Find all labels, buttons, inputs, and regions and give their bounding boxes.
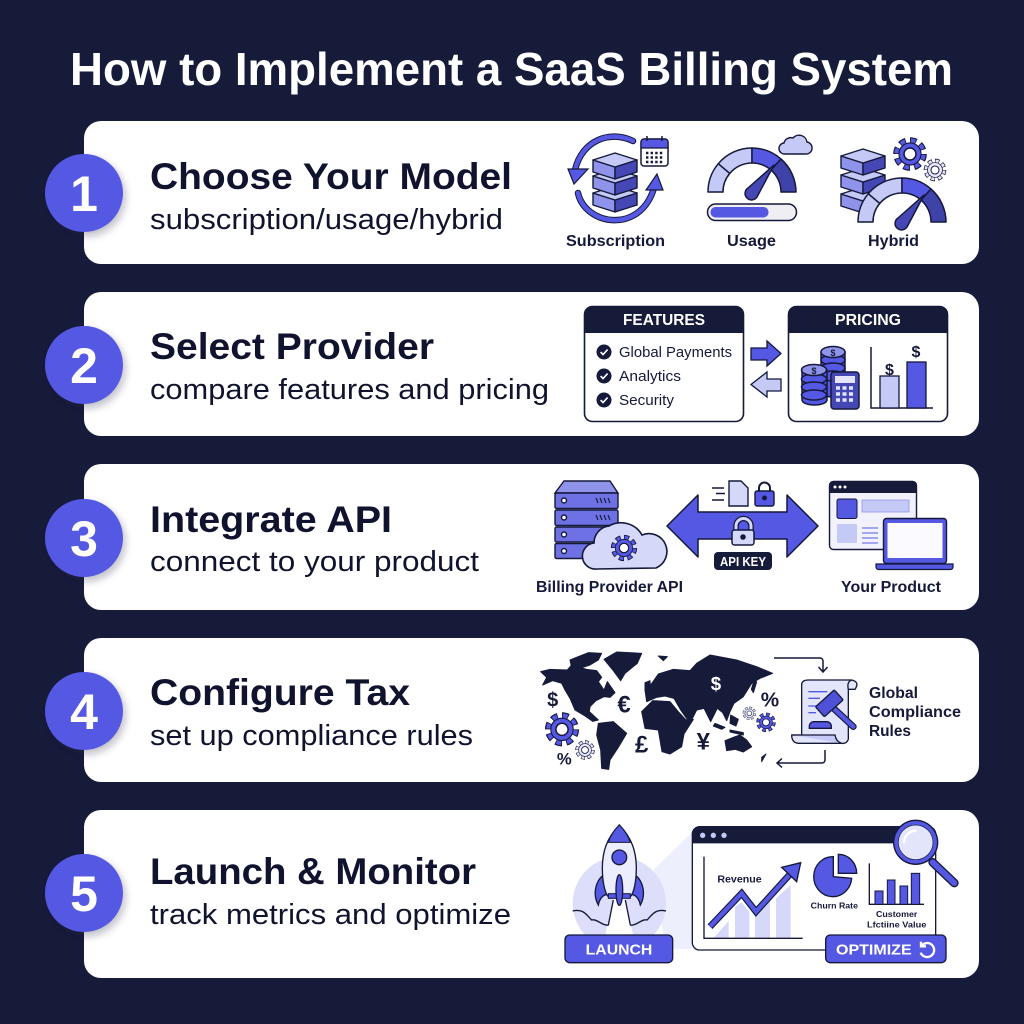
pricing table: PRICING [835, 312, 901, 329]
panel: step 4 configure tax [45, 638, 979, 782]
icon: hybrid [841, 141, 946, 230]
world map with currencies: % [557, 750, 572, 769]
icon: usage gauge [708, 135, 812, 220]
features table: Analytics [619, 369, 681, 385]
button: launch: LAUNCH [586, 942, 652, 959]
subtitle: track metrics and optimize: track metrics and optimize [150, 899, 511, 931]
arrow: rules back to map [777, 750, 825, 768]
arrow: two-way api connection [667, 495, 818, 557]
step number 2 [45, 326, 123, 404]
step number 3 [45, 499, 123, 577]
icon: compliance scroll and gavel [792, 680, 857, 743]
label: subscription: Subscription [566, 233, 665, 250]
pricing table [788, 306, 948, 422]
heading: choose your model: Choose Your Model [150, 156, 512, 197]
pricing table: $ [830, 348, 836, 358]
step number 4 [45, 672, 123, 750]
chart: customer lifetime value bars: Lfctiine Value [867, 919, 927, 929]
heading: select provider: Select Provider [150, 326, 434, 367]
panel: step 3 integrate api [45, 464, 979, 610]
step number 1: 1 [70, 166, 98, 222]
heading: launch and monitor: Launch & Monitor [150, 851, 476, 892]
features table: Global Payments [619, 345, 732, 361]
icon: document and lock [712, 481, 774, 506]
icon: api lock [732, 519, 754, 545]
label: billing provider api: Billing Provider API [536, 579, 683, 596]
world map with currencies: € [617, 692, 631, 719]
world map with currencies: $ [711, 673, 722, 694]
badge: api key: API KEY [720, 554, 766, 569]
label: global compliance rules: Rules [869, 723, 911, 740]
light beam [653, 832, 692, 949]
icon: billing provider server and cloud [555, 481, 667, 569]
world map with currencies [541, 652, 779, 769]
chart: customer lifetime value bars [867, 863, 927, 929]
pricing table: $ [885, 362, 894, 379]
world map with currencies: ¥ [697, 728, 711, 755]
label: hybrid: Hybrid [868, 233, 919, 250]
dashboard window [692, 827, 936, 950]
step number 2: 2 [70, 338, 98, 394]
world map with currencies: $ [547, 690, 558, 712]
title: How to Implement a SaaS Billing System [70, 43, 953, 95]
label: your product: Your Product [841, 579, 942, 596]
subtitle: connect to your product: connect to your product [150, 546, 479, 578]
subtitle: compare features and pricing: compare features and pricing [150, 374, 549, 406]
label: global compliance rules: Compliance [869, 704, 961, 721]
step number 4: 4 [70, 684, 98, 740]
panel: step 2 select provider [45, 292, 979, 436]
subtitle: subscription usage hybrid: subscription/usage/hybrid [150, 204, 503, 236]
features table [584, 306, 744, 422]
icon: subscription [568, 136, 668, 220]
chart: revenue trend: Revenue [717, 874, 762, 885]
step number 5 [45, 854, 123, 932]
arrow: features to pricing [751, 341, 781, 366]
arrow: pricing to features [751, 372, 781, 397]
chart: revenue trend [704, 857, 803, 938]
features table: Security [619, 393, 675, 409]
arrow: map to rules [774, 658, 828, 672]
label: global compliance rules [869, 685, 961, 740]
panel: step 1 choose your model [45, 121, 979, 264]
button: optimize: OPTIMIZE [836, 942, 912, 959]
button: optimize [826, 935, 946, 963]
features table: FEATURES [623, 312, 705, 329]
heading: integrate api: Integrate API [150, 499, 392, 540]
world map with currencies: % [761, 689, 779, 712]
step number 3: 3 [70, 511, 98, 567]
world map with currencies: £ [635, 732, 649, 759]
icon: your product browser and laptop [830, 482, 953, 570]
heading: configure tax: Configure Tax [150, 672, 410, 713]
launch to dashboard illustration [565, 820, 954, 963]
step number 5: 5 [70, 866, 98, 922]
button: launch [565, 935, 673, 963]
icon: rocket [573, 825, 666, 950]
pricing table: $ [811, 366, 817, 376]
panel: step 5 launch and monitor [45, 810, 979, 978]
subtitle: set up compliance rules: set up compliance rules [150, 720, 473, 752]
chart: churn rate pie: Churn Rate [811, 900, 858, 910]
icon: magnifying glass [893, 820, 954, 883]
label: global compliance rules: Global [869, 685, 918, 702]
label: usage: Usage [727, 233, 776, 250]
step number 1 [45, 154, 123, 232]
chart: customer lifetime value bars: Customer [876, 909, 918, 919]
pricing table: $ [912, 344, 921, 361]
chart: churn rate pie [811, 854, 858, 910]
